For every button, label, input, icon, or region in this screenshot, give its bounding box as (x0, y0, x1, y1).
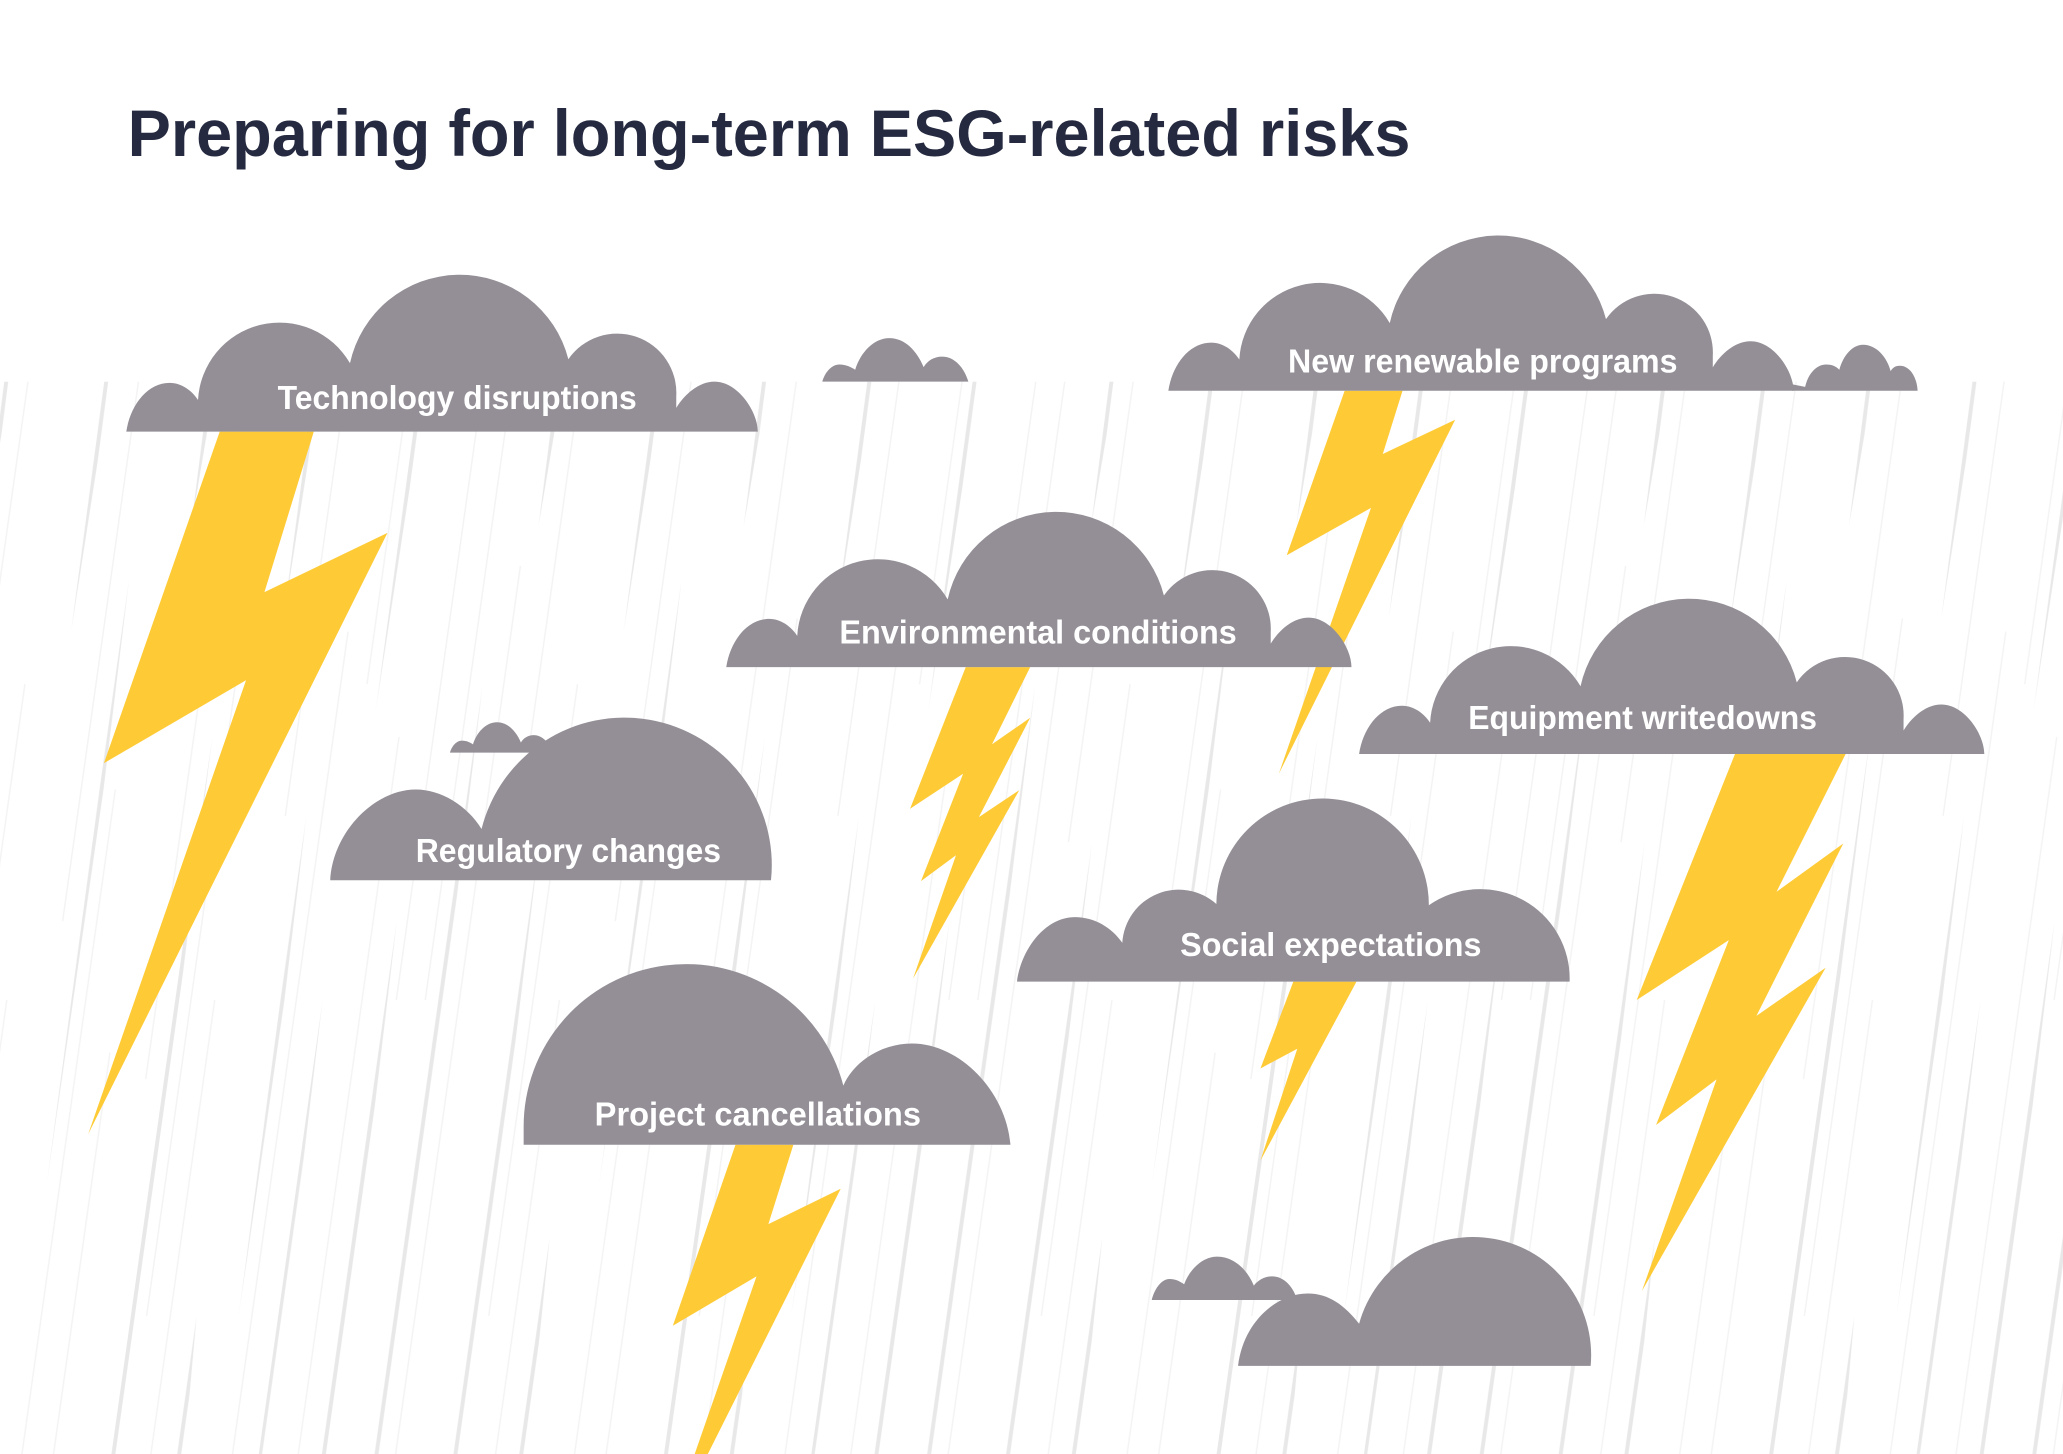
lightning bolt: equipment writedowns (1637, 754, 1846, 1291)
cloud: environmental conditions (726, 512, 1351, 667)
title: Preparing for long-term ESG-related risks (128, 96, 1410, 170)
label: technology disruptions: Technology disruptions (278, 379, 637, 416)
label: new renewable programs: New renewable programs (1288, 342, 1678, 379)
cloud: unlabelled lower right (1238, 1237, 1591, 1366)
small cloud: lower right (1152, 1257, 1297, 1300)
cloud: social expectations (1017, 798, 1570, 982)
cloud: new renewable programs (1168, 236, 1794, 391)
small cloud: beside new renewable programs (1792, 345, 1918, 391)
cloud: regulatory changes (330, 718, 772, 880)
cloud: technology disruptions (126, 275, 758, 432)
cloud: project cancellations (524, 964, 1010, 1145)
cloud: equipment writedowns (1359, 599, 1984, 754)
label: equipment writedowns: Equipment writedowns (1468, 699, 1817, 736)
lightning bolt: environmental conditions (910, 667, 1030, 978)
lightning bolt: technology disruptions (88, 432, 387, 1134)
label: environmental conditions: Environmental conditions (839, 613, 1237, 650)
label: social expectations: Social expectations (1180, 926, 1481, 963)
lightning bolt: project cancellations (673, 1145, 841, 1454)
label: regulatory changes: Regulatory changes (416, 832, 721, 869)
lightning bolt: new renewable programs (1279, 391, 1455, 774)
label: project cancellations: Project cancellations (595, 1096, 921, 1133)
lightning bolt: social expectations (1260, 982, 1356, 1161)
rain (0, 382, 2063, 1454)
small cloud: above regulatory changes (450, 722, 552, 753)
small cloud: top centre (822, 338, 968, 382)
